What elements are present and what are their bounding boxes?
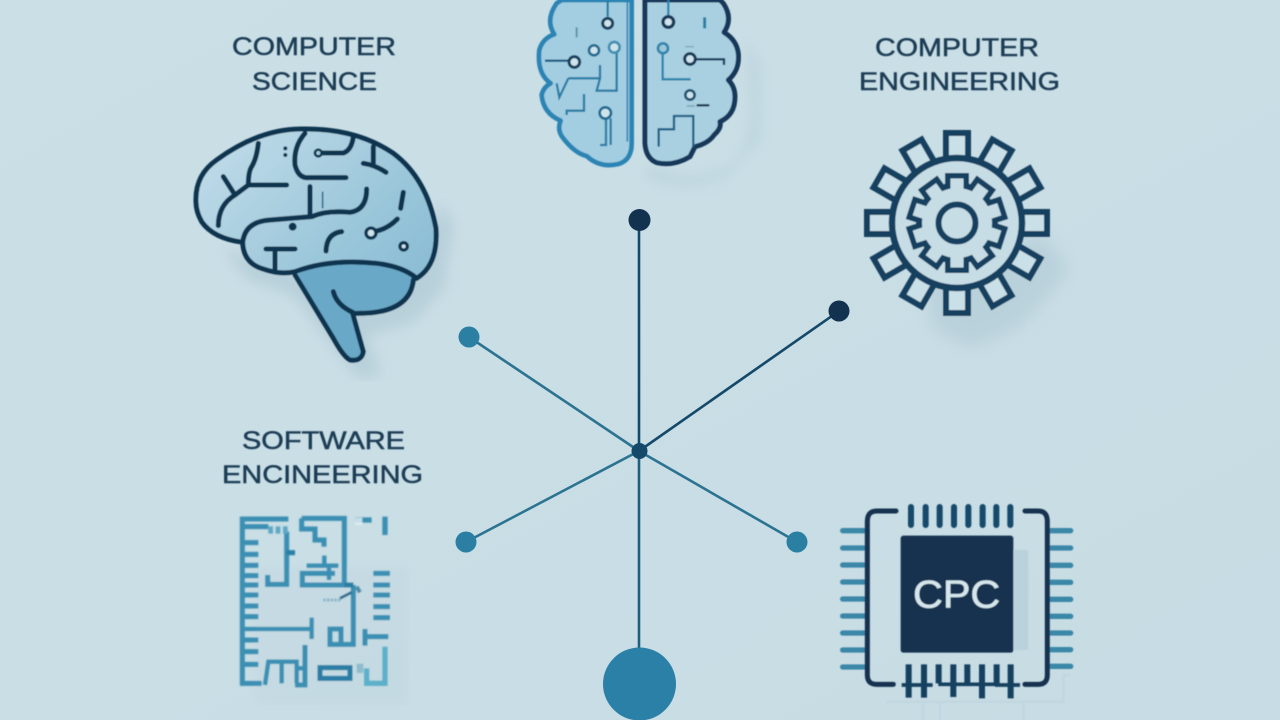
processor core	[901, 536, 1013, 653]
right hemisphere traces	[658, 0, 724, 147]
chip frame brackets	[867, 511, 1047, 684]
node: lower left	[456, 532, 476, 552]
connector lines	[466, 220, 839, 660]
bottom pins	[902, 664, 1020, 698]
hub and spoke diagram	[456, 209, 850, 720]
node: centre hub	[632, 443, 648, 459]
heading: computer science	[232, 33, 396, 96]
inner cog	[906, 173, 1008, 273]
node: upper left	[458, 326, 480, 348]
top pins	[911, 507, 1010, 525]
heading: software engineering: SOFTWARE	[242, 427, 405, 455]
icon: circuit board	[242, 517, 408, 705]
outer square teeth	[867, 133, 1047, 313]
icon: CPU chip	[843, 507, 1071, 720]
icon: gear	[867, 133, 1069, 348]
icon: side view brain	[196, 129, 453, 378]
processor core: CPC	[913, 573, 1000, 617]
left pins	[843, 531, 865, 667]
node: bottom large	[603, 648, 676, 720]
heading: computer engineering: COMPUTER	[875, 34, 1039, 62]
icon: circuit brain top centre	[539, 0, 760, 186]
left hemisphere traces	[545, 0, 620, 145]
heading: software engineering	[222, 427, 423, 489]
heading: computer science: SCIENCE	[252, 68, 377, 96]
right pins	[1050, 531, 1071, 666]
node: top	[628, 209, 650, 231]
heading: software engineering: ENCINEERING	[222, 461, 423, 489]
node: upper right	[828, 300, 850, 322]
heading: computer engineering	[859, 34, 1060, 96]
heading: computer science: COMPUTER	[232, 33, 396, 61]
heading: computer engineering: ENGINEERING	[859, 68, 1060, 96]
node: lower right	[786, 532, 808, 552]
